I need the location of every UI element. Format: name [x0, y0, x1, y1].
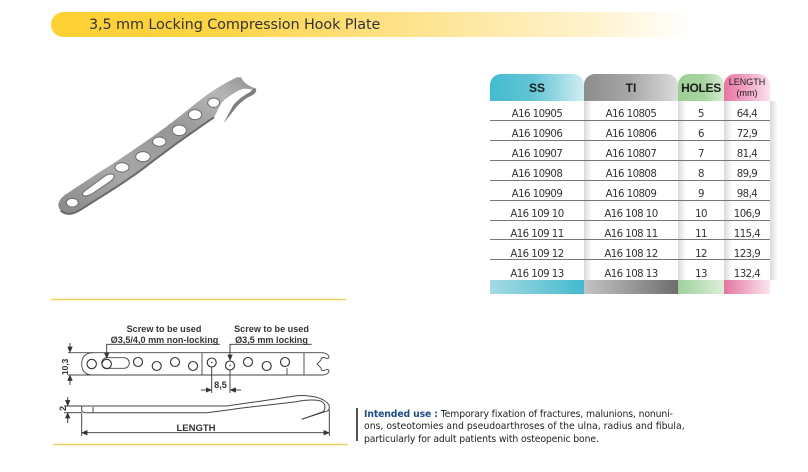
row 7 holes — [490, 141, 770, 161]
row 5 holes: A16 10905 — [512, 109, 562, 120]
row 5 holes: A16 10805 — [606, 109, 656, 120]
table header: LENGTH (mm) — [724, 74, 770, 101]
row 7 holes: 81,4 — [737, 149, 757, 160]
row 11 holes — [490, 221, 770, 240]
row 13 holes: A16 109 13 — [510, 269, 564, 280]
row 6 holes: A16 10906 — [512, 129, 562, 140]
row 13 holes: 132,4 — [734, 269, 760, 280]
row 8 holes: 8 — [698, 169, 704, 180]
row 9 holes: 98,4 — [737, 189, 757, 200]
row 10 holes: 10 — [695, 209, 707, 220]
table header: LENGTH (mm): LENGTH — [729, 77, 765, 87]
screw labels — [58, 324, 309, 434]
table header: HOLES — [678, 74, 724, 101]
row 9 holes: 9 — [698, 189, 704, 200]
row 12 holes: A16 108 12 — [604, 249, 658, 260]
plate top view — [68, 353, 329, 375]
row 8 holes — [490, 161, 770, 181]
row 11 holes: A16 109 11 — [510, 229, 564, 240]
table header: SS — [490, 74, 584, 101]
screw labels: Screw to be used — [234, 324, 309, 334]
row 10 holes — [490, 201, 770, 221]
row 6 holes: A16 10806 — [606, 129, 656, 140]
table footer: TI colour bar — [584, 280, 678, 294]
row 10 holes: A16 109 10 — [510, 209, 564, 220]
divider bar for intended use — [356, 408, 358, 441]
table header: TI: TI — [626, 80, 636, 94]
screw labels: 8,5 — [214, 380, 227, 390]
row 5 holes: 64,4 — [737, 109, 757, 120]
row 12 holes — [490, 240, 770, 260]
row 13 holes — [510, 269, 760, 280]
table header: TI — [584, 74, 678, 101]
row 11 holes: 115,4 — [734, 229, 760, 240]
table header: SS: SS — [529, 80, 545, 94]
row 6 holes — [490, 121, 770, 141]
row 6 holes: 72,9 — [737, 129, 757, 140]
row 12 holes: 12 — [695, 249, 707, 260]
image: hook plate photo — [58, 77, 256, 215]
screw labels: 2 — [58, 406, 68, 411]
row 5 holes: 5 — [698, 109, 704, 120]
row 7 holes: A16 10807 — [606, 149, 656, 160]
text block: intended use — [364, 409, 685, 445]
row 11 holes: 11 — [695, 229, 707, 240]
row 7 holes: 7 — [698, 149, 704, 160]
row 9 holes: A16 10809 — [606, 189, 656, 200]
row 8 holes: 89,9 — [737, 169, 757, 180]
row 8 holes: A16 10908 — [512, 169, 562, 180]
screw labels: Screw to be used — [127, 324, 201, 334]
row 12 holes: A16 109 12 — [510, 249, 564, 260]
title: 3,5 mm Locking Compression Hook Plate — [89, 17, 380, 33]
row 11 holes: A16 108 11 — [604, 229, 658, 240]
leader lines — [70, 343, 312, 393]
row 13 holes: 13 — [695, 269, 707, 280]
plate side view — [82, 396, 329, 419]
row 10 holes: A16 108 10 — [604, 209, 658, 220]
text block: intended use: particularly for adult patients with osteopenic bone. — [364, 434, 599, 445]
row 7 holes: A16 10907 — [512, 149, 562, 160]
row 5 holes — [490, 101, 770, 121]
table header: HOLES: HOLES — [681, 80, 721, 94]
text block: intended use: ons, osteotomies and pseudoarthroses of the ulna, radius and fibula, — [364, 421, 685, 432]
table footer: holes colour bar — [678, 280, 724, 294]
table footer: SS colour bar — [490, 280, 584, 294]
screw labels: Ø3,5/4,0 mm non-locking — [111, 335, 218, 345]
screw labels: 10,3 — [60, 358, 70, 375]
row 12 holes: 123,9 — [734, 249, 760, 260]
table header: LENGTH (mm): (mm) — [736, 88, 757, 98]
row 13 holes: A16 108 13 — [604, 269, 658, 280]
row 8 holes: A16 10808 — [606, 169, 656, 180]
row 9 holes — [490, 181, 770, 201]
title bar — [51, 12, 691, 37]
row 10 holes: 106,9 — [734, 209, 760, 220]
text block: intended use: Intended use : Temporary fixation of fractures, malunions, nonuni- — [364, 409, 673, 420]
screw labels: Ø3,5 mm locking — [235, 335, 308, 345]
table footer: length colour bar — [724, 280, 770, 294]
row 9 holes: A16 10909 — [512, 189, 562, 200]
screw labels: LENGTH — [176, 423, 216, 434]
row 6 holes: 6 — [698, 129, 704, 140]
